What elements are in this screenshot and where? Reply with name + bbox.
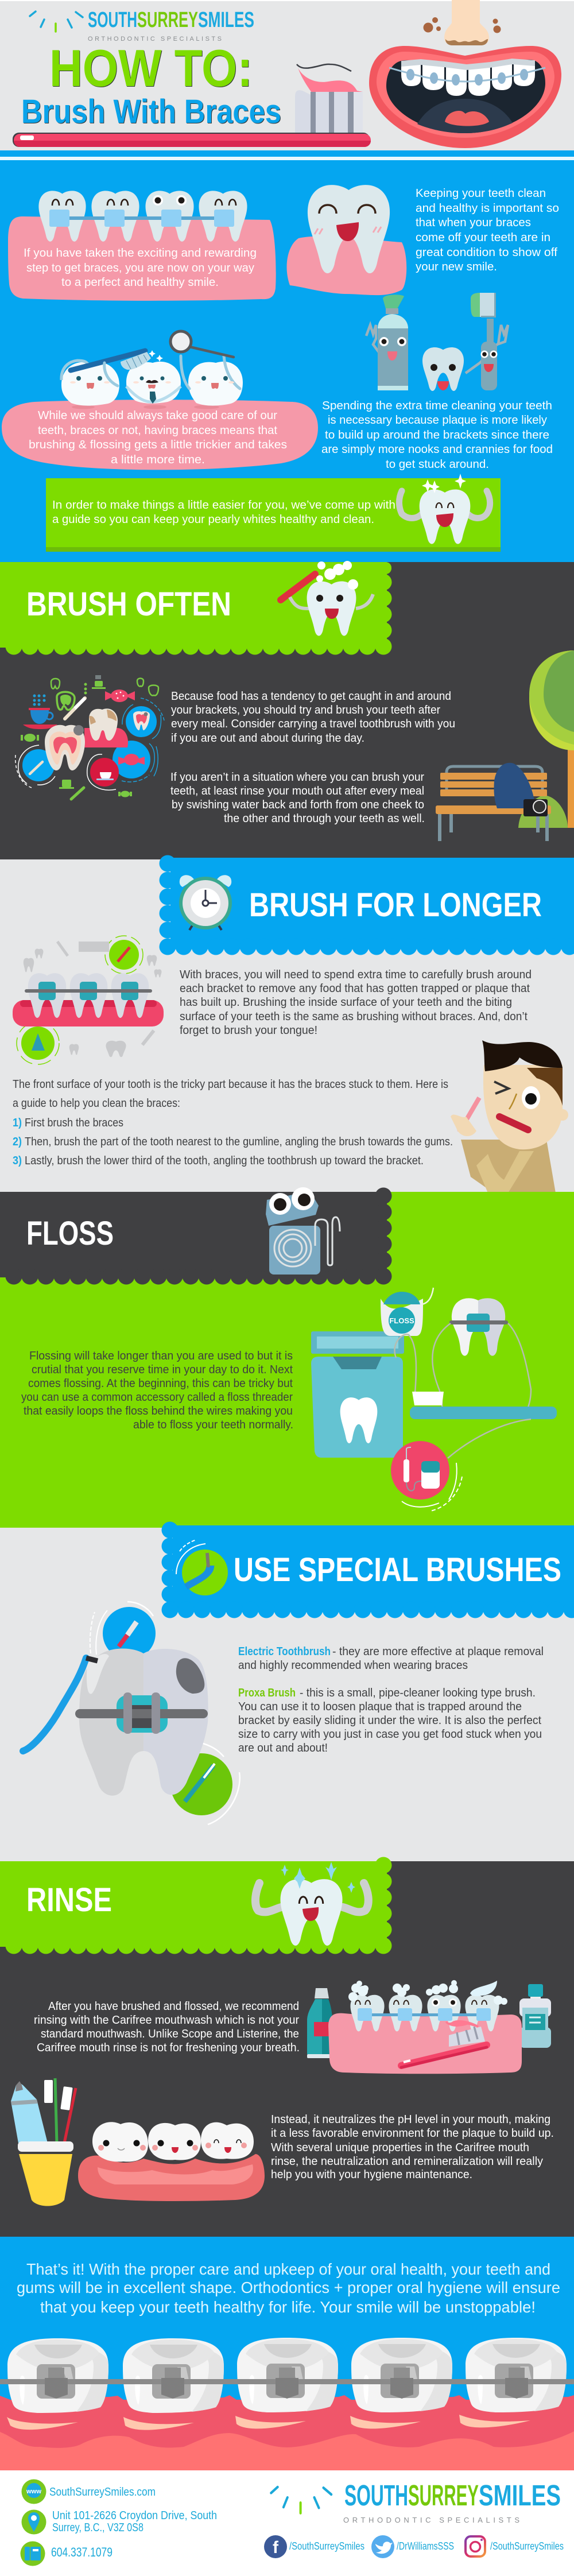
text: front surface guide steps: a guide to help you clean the braces:: [13, 1097, 180, 1110]
text: flossing: crutial that you reserve time in your day to do it. Next: [32, 1363, 293, 1376]
icon: floss dispenser character: [266, 1187, 340, 1275]
text: if you aren't able to brush: [170, 770, 425, 825]
icon: tooth brushing with foam: [281, 561, 373, 636]
text: proxa brush: [238, 1686, 542, 1754]
text: electric toothbrush: Electric Toothbrush: [238, 1645, 331, 1658]
text: neutralizes the pH: [271, 2113, 554, 2181]
text: proxa brush: - this is a small, pipe-cleaner looking type brush.: [300, 1686, 536, 1699]
text: if you aren't able to brush: by swishing water back and forth from one cheek to: [172, 798, 424, 811]
social: twitter: /DrWilliamsSSS: [397, 2540, 454, 2552]
panel: introduction: [0, 150, 574, 562]
illustration: toothpaste tube, tooth and brush characters: [366, 293, 508, 391]
panel: brush often: [0, 561, 574, 859]
text: front surface guide steps: [13, 1078, 453, 1167]
contact: address: Unit 101-2626 Croydon Drive, South: [52, 2509, 217, 2522]
logo: SOUTH: [344, 2479, 408, 2512]
text: because food has a tendency: if you are out and about during the day.: [171, 731, 364, 745]
text: keeping your teeth clean: and healthy is important so: [416, 202, 559, 215]
panel: rinse: [0, 1861, 574, 2237]
text: neutralizes the pH: Instead, it neutralizes the pH level in your mouth, making: [271, 2113, 550, 2126]
panel: header: [0, 0, 574, 151]
text: front surface guide steps: Lastly, brush the lower third of the tooth, angling the toothbrush up toward the bracket.: [25, 1154, 424, 1167]
logo: [30, 8, 254, 42]
text: flossing: [21, 1349, 293, 1431]
text: spending the extra time: to build up around the brackets since there: [325, 428, 549, 441]
text: flossing: comes flossing. At the beginning, this can be tricky but: [28, 1377, 293, 1390]
text: keeping your teeth clean: [416, 187, 559, 273]
heading band: use special brushes: [170, 1525, 574, 1611]
text: because food has a tendency: every meal. Consider carrying a travel toothbrush with you: [171, 717, 455, 730]
social: instagram: [466, 2536, 564, 2556]
text: exciting and rewarding step: If you have taken the exciting and rewarding: [24, 246, 257, 259]
text: that's it: That’s it! With the proper care and upkeep of your oral health, your teeth and: [26, 2260, 550, 2278]
panel: conclusion: [0, 2237, 574, 2470]
callout: guide box: a guide so you can keep your pearly whites healthy and clean.: [52, 513, 374, 526]
text: neutralizes the pH: rinse, the neutralization and remineralization will really: [271, 2155, 544, 2168]
title: brush with braces: Brush With Braces: [21, 93, 281, 130]
text: if you aren't able to brush: the other and through your teeth as well.: [224, 812, 425, 825]
contact: address: Surrey, B.C., V3Z 0S8: [52, 2521, 144, 2534]
illustration: gum with three teeth, brush and mirror: [2, 331, 318, 470]
illustration: gum with four braced teeth: [8, 191, 276, 301]
text: front surface guide steps: 1): [13, 1116, 22, 1129]
text: proxa brush: size to carry with you just in case you get food stuck when you: [238, 1727, 542, 1741]
contact: website: SouthSurreySmiles.com: [49, 2486, 156, 2498]
text: with braces: forget to brush your tongue!: [180, 1024, 317, 1037]
text: proxa brush: Proxa Brush: [238, 1686, 296, 1699]
text: neutralizes the pH: With several unique properties in the Carifree mouth: [271, 2141, 529, 2154]
text: after you have brushed: rinsing with the Carifree mouthwash which is not your: [34, 2013, 299, 2027]
contact: website: www: [26, 2488, 41, 2495]
icon: alarm clock: [179, 875, 232, 930]
logo: ORTHODONTIC SPECIALISTS: [343, 2516, 519, 2524]
text: neutralizes the pH: help you with your hygiene maintenance.: [271, 2168, 472, 2181]
text: that's it: [17, 2260, 560, 2316]
text: always take good care: a little more time.: [111, 453, 205, 466]
illustration: bench with backpack and camera: [436, 763, 568, 841]
text: that's it: that you keep your teeth healthy for life. Your smile will be unstoppable!: [40, 2298, 536, 2316]
text: after you have brushed: Carifree mouth rinse is not for freshening your breath.: [37, 2041, 300, 2054]
panel: footer: [0, 2470, 574, 2576]
callout: guide box: [46, 474, 501, 552]
logo: [271, 2479, 561, 2524]
text: if you aren't able to brush: teeth, at least rinse your mouth out after every meal: [170, 784, 424, 797]
heading band: floss: FLOSS: [26, 1215, 114, 1252]
text: keeping your teeth clean: Keeping your teeth clean: [416, 187, 546, 200]
text: spending the extra time: is necessary because plaque is more likely: [328, 413, 548, 427]
panel: floss: [0, 1187, 574, 1528]
logo: SURREY: [137, 8, 198, 32]
icon: nose: [424, 0, 501, 45]
text: after you have brushed: After you have brushed and flossed, we recommend: [48, 2000, 299, 2013]
text: with braces: has built up. Brushing the inside surface of your teeth and the biting: [180, 995, 512, 1009]
heading band: floss: [0, 1187, 387, 1277]
heading band: brush often: [0, 561, 391, 648]
text: proxa brush: are out and about!: [238, 1741, 328, 1754]
illustration: large braced tooth with brushes: [23, 1602, 240, 1824]
text: exciting and rewarding step: step to get braces, you are now on your way: [26, 261, 255, 274]
text: keeping your teeth clean: your new smile.: [416, 260, 497, 273]
illustration: braces teeth and icons: [13, 936, 164, 1064]
text: spending the extra time: Spending the extra time cleaning your teeth: [322, 399, 552, 412]
text: exciting and rewarding step: [24, 246, 257, 289]
title: how to: HOW TO:: [49, 40, 253, 98]
text: that's it: gums will be in excellent shape. Orthodontics + proper oral hygiene will ensure: [17, 2279, 560, 2296]
social: twitter: [371, 2535, 454, 2558]
logo: ORTHODONTIC SPECIALISTS: [88, 36, 222, 42]
illustration: braces teeth and gums: [0, 2338, 574, 2470]
text: with braces: surface of your teeth is the same as brushing without braces. And, don’t: [180, 1010, 528, 1023]
illustration: foods that damage teeth: [15, 675, 164, 799]
contact: address: [22, 2509, 217, 2534]
text: always take good care: [29, 409, 287, 466]
heading band: rinse: [0, 1861, 387, 1947]
callout: guide box: In order to make things a little easier for you, we’ve come up with: [52, 498, 395, 512]
text: electric toothbrush: - they are more effective at plaque removal: [332, 1645, 544, 1658]
text: spending the extra time: [321, 399, 553, 471]
text: exciting and rewarding step: to a perfect and healthy smile.: [61, 276, 219, 289]
text: front surface guide steps: 3): [13, 1154, 22, 1167]
heading band: brush often: BRUSH OFTEN: [26, 586, 231, 623]
text: flossing: you can use a common accessory called a floss threader: [21, 1390, 293, 1404]
social: facebook: /SouthSurreySmiles: [289, 2540, 364, 2552]
illustration: tree: [529, 650, 574, 828]
icon: muscle tooth: [399, 474, 490, 544]
text: spending the extra time: are simply more nooks and crannies for food: [321, 443, 553, 456]
text: electric toothbrush: [238, 1645, 544, 1672]
text: proxa brush: bracket by easily sliding it under the wire. It is also the perfect: [238, 1714, 541, 1727]
panel: use special brushes: [0, 1525, 574, 1861]
icon: water flosser in red circle: [391, 1441, 462, 1511]
text: after you have brushed: [34, 2000, 300, 2054]
text: if you aren't able to brush: If you aren’t in a situation where you can brush your: [170, 770, 424, 784]
text: after you have brushed: standard mouthwash. Unlike Scope and Listerine, the: [41, 2027, 299, 2040]
text: always take good care: brushing & flossing gets a little trickier and takes: [29, 438, 287, 451]
contact: phone: [21, 2541, 113, 2566]
illustration: teeth with foam, toothpaste, mouthwash and brush: [307, 1980, 551, 2074]
heading band: brush for longer: [168, 858, 574, 948]
illustration: floss, mouthwash, brush and braces tooth: FLOSS: [389, 1316, 414, 1325]
text: spending the extra time: to get stuck around.: [386, 458, 489, 471]
logo: SMILES: [198, 8, 254, 32]
text: front surface guide steps: The front surface of your tooth is the tricky part because it has the braces stuck to them. Here is: [13, 1078, 448, 1091]
panel: brush for longer: [0, 858, 574, 1193]
icon: interdental brush in green circle: [176, 1540, 228, 1595]
logo: SURREY: [408, 2479, 479, 2512]
text: flossing: that easily loops the floss behind the wires making you: [24, 1404, 293, 1417]
icon: open mouth with braces: [369, 46, 561, 148]
text: front surface guide steps: 2): [13, 1135, 22, 1148]
icon: flexing tooth with sparkles: [255, 1862, 369, 1946]
text: because food has a tendency: your brackets, you should try and brush your teeth after: [171, 703, 440, 716]
text: always take good care: While we should always take good care of our: [38, 409, 277, 422]
text: front surface guide steps: Then, brush the part of the tooth nearest to the gumline, angling the brush towards the gums.: [25, 1135, 453, 1148]
illustration: cup, brushes and three happy teeth on gum: [11, 2078, 265, 2206]
text: proxa brush: You can use it to loosen plaque that is trapped around the: [238, 1700, 522, 1713]
text: keeping your teeth clean: come off your teeth are in: [416, 231, 550, 244]
illustration: happy tooth on gum: [287, 185, 406, 295]
text: flossing: Flossing will take longer than you are used to but it is: [29, 1349, 293, 1362]
heading band: rinse: RINSE: [26, 1881, 112, 1919]
text: flossing: able to floss your teeth normally.: [133, 1418, 293, 1431]
text: because food has a tendency: [171, 689, 455, 745]
social: facebook: f: [273, 2538, 279, 2557]
text: keeping your teeth clean: great condition to show off: [416, 246, 557, 259]
text: with braces: [180, 968, 532, 1037]
text: with braces: With braces, you will need to spend extra time to carefully brush around: [180, 968, 532, 981]
contact: website: [22, 2479, 156, 2504]
social: facebook: [264, 2535, 364, 2558]
text: always take good care: teeth, braces or not, having braces means that: [38, 424, 277, 437]
text: because food has a tendency: Because food has a tendency to get caught in and around: [171, 689, 451, 703]
text: neutralizes the pH: it a less favorable environment for the plaque to build up.: [271, 2126, 554, 2140]
icon: toothbrush with paste: [13, 64, 371, 147]
contact: phone: 604.337.1079: [51, 2545, 113, 2559]
text: with braces: each bracket to remove any food that has gotten trapped or plaque that: [180, 982, 530, 995]
logo: SOUTH: [88, 8, 137, 32]
illustration: man brushing teeth: [451, 1040, 568, 1193]
text: electric toothbrush: and highly recommended when wearing braces: [238, 1659, 468, 1672]
illustration: floss, mouthwash, brush and braces tooth: [311, 1288, 557, 1511]
text: keeping your teeth clean: that when your braces: [416, 216, 531, 229]
text: front surface guide steps: First brush the braces: [25, 1116, 123, 1129]
